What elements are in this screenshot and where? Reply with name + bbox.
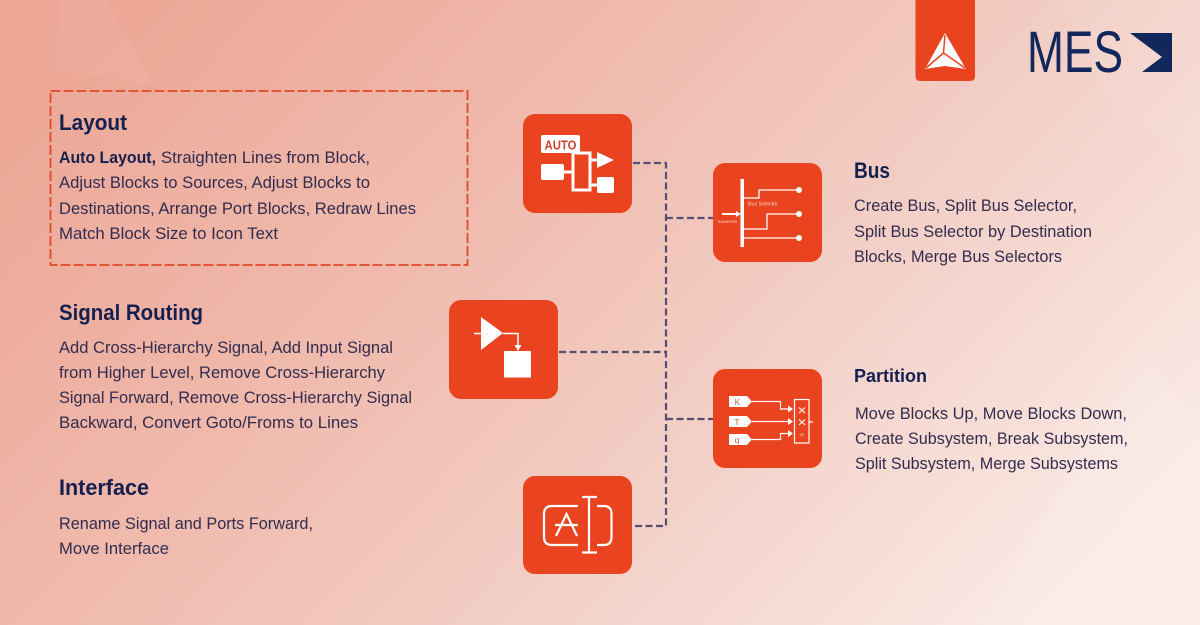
partition text	[855, 405, 1128, 473]
layout panel	[50, 91, 468, 265]
icon: partition: q	[735, 435, 740, 445]
icon: signal routing	[449, 300, 558, 399]
layout text: Match Block Size to Icon Text	[59, 225, 278, 243]
layout text: Auto Layout,	[59, 149, 156, 167]
bus panel	[854, 158, 1092, 266]
icon: bus selector: Bus Selector	[748, 202, 778, 208]
signal routing text	[59, 339, 412, 432]
icon: partition	[713, 369, 822, 468]
interface panel	[59, 475, 313, 558]
icon: auto layout: AUTO	[544, 138, 577, 152]
icon: interface rename	[523, 476, 632, 574]
interface text: Rename Signal and Ports Forward,	[59, 515, 313, 533]
signal routing heading: Signal Routing	[59, 300, 203, 325]
partition panel	[854, 366, 1128, 473]
icon: bus selector: sources	[718, 219, 738, 224]
signal routing text: Add Cross-Hierarchy Signal, Add Input Signal	[59, 339, 393, 357]
bus text: Create Bus, Split Bus Selector,	[854, 197, 1077, 215]
signal routing text: Backward, Convert Goto/Froms to Lines	[59, 414, 358, 432]
icon: partition: ÷	[799, 430, 805, 441]
icon: auto layout	[523, 114, 632, 213]
signal routing panel	[59, 300, 412, 432]
bus text: Blocks, Merge Bus Selectors	[854, 248, 1062, 266]
layout text: Adjust Blocks to Sources, Adjust Blocks to	[59, 174, 370, 192]
signal routing text: from Higher Level, Remove Cross-Hierarchy	[59, 364, 386, 382]
layout text: Destinations, Arrange Port Blocks, Redraw Lines	[59, 200, 416, 218]
layout text	[59, 149, 416, 243]
dashed connector lines	[559, 163, 713, 527]
bus text: Split Bus Selector by Destination	[854, 223, 1092, 241]
bus text	[854, 197, 1092, 266]
interface text: Move Interface	[59, 540, 169, 558]
interface text	[59, 515, 313, 558]
partition text: Move Blocks Up, Move Blocks Down,	[855, 405, 1127, 423]
logo: MES: MES	[1027, 20, 1123, 85]
icon: bus selector	[713, 163, 822, 262]
layout text: Straighten Lines from Block,	[161, 149, 370, 167]
layout dashed highlight box	[50, 91, 468, 265]
bus heading: Bus	[854, 158, 890, 183]
interface heading: Interface	[59, 475, 149, 500]
icon: partition: T	[734, 417, 740, 427]
icon: partition: K	[735, 397, 741, 407]
signal routing text: Signal Forward, Remove Cross-Hierarchy Signal	[59, 389, 412, 407]
logo: orange tab	[916, 0, 975, 81]
partition text: Split Subsystem, Merge Subsystems	[855, 455, 1118, 473]
partition text: Create Subsystem, Break Subsystem,	[855, 430, 1128, 448]
partition heading: Partition	[854, 366, 927, 386]
layout heading: Layout	[59, 110, 128, 135]
